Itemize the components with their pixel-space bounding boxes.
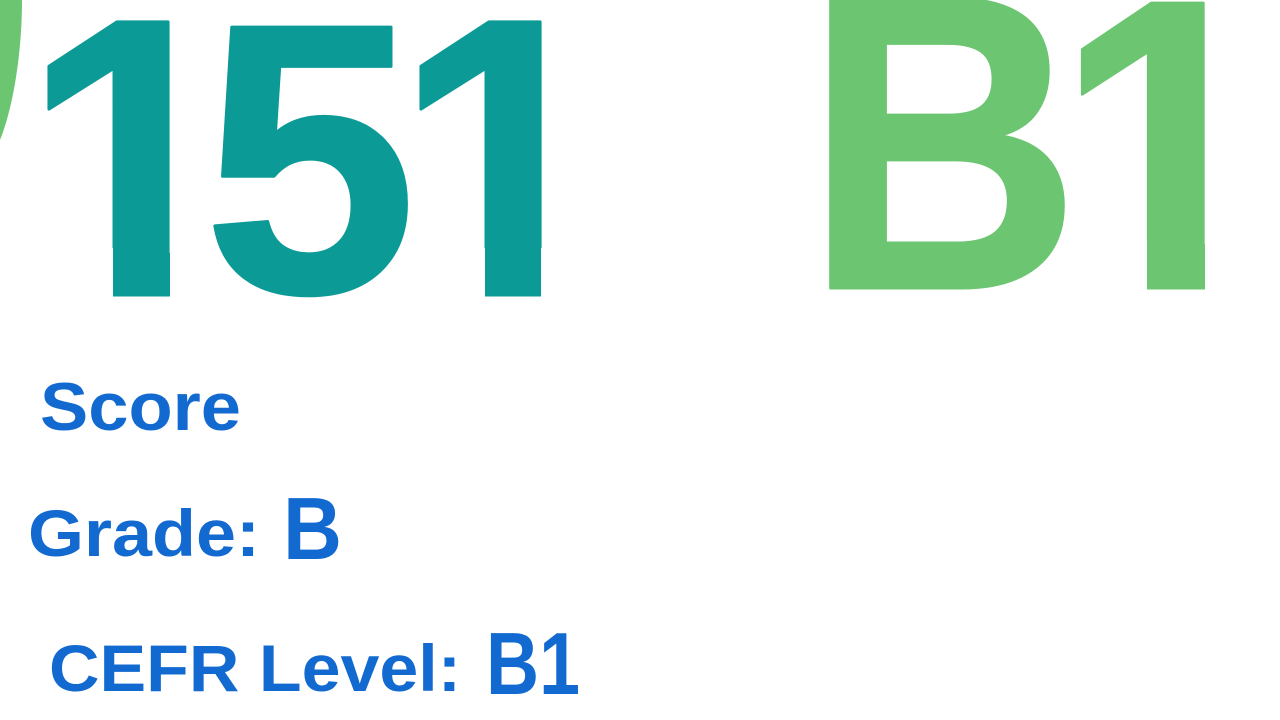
- label: Grade B: [28, 479, 342, 578]
- label: Score: Score: [40, 369, 241, 445]
- label: Grade B: B: [283, 479, 342, 578]
- label: CEFR Level B1: CEFR Level:: [49, 631, 461, 705]
- label: CEFR Level B1: [49, 614, 580, 713]
- label: Grade B: Grade:: [28, 496, 260, 570]
- score number 151: [15, 0, 616, 379]
- label: CEFR Level B1: B1: [486, 614, 580, 713]
- CEFR large value B1: [805, 0, 1280, 378]
- decorative green arc at the left edge: [0, 0, 22, 140]
